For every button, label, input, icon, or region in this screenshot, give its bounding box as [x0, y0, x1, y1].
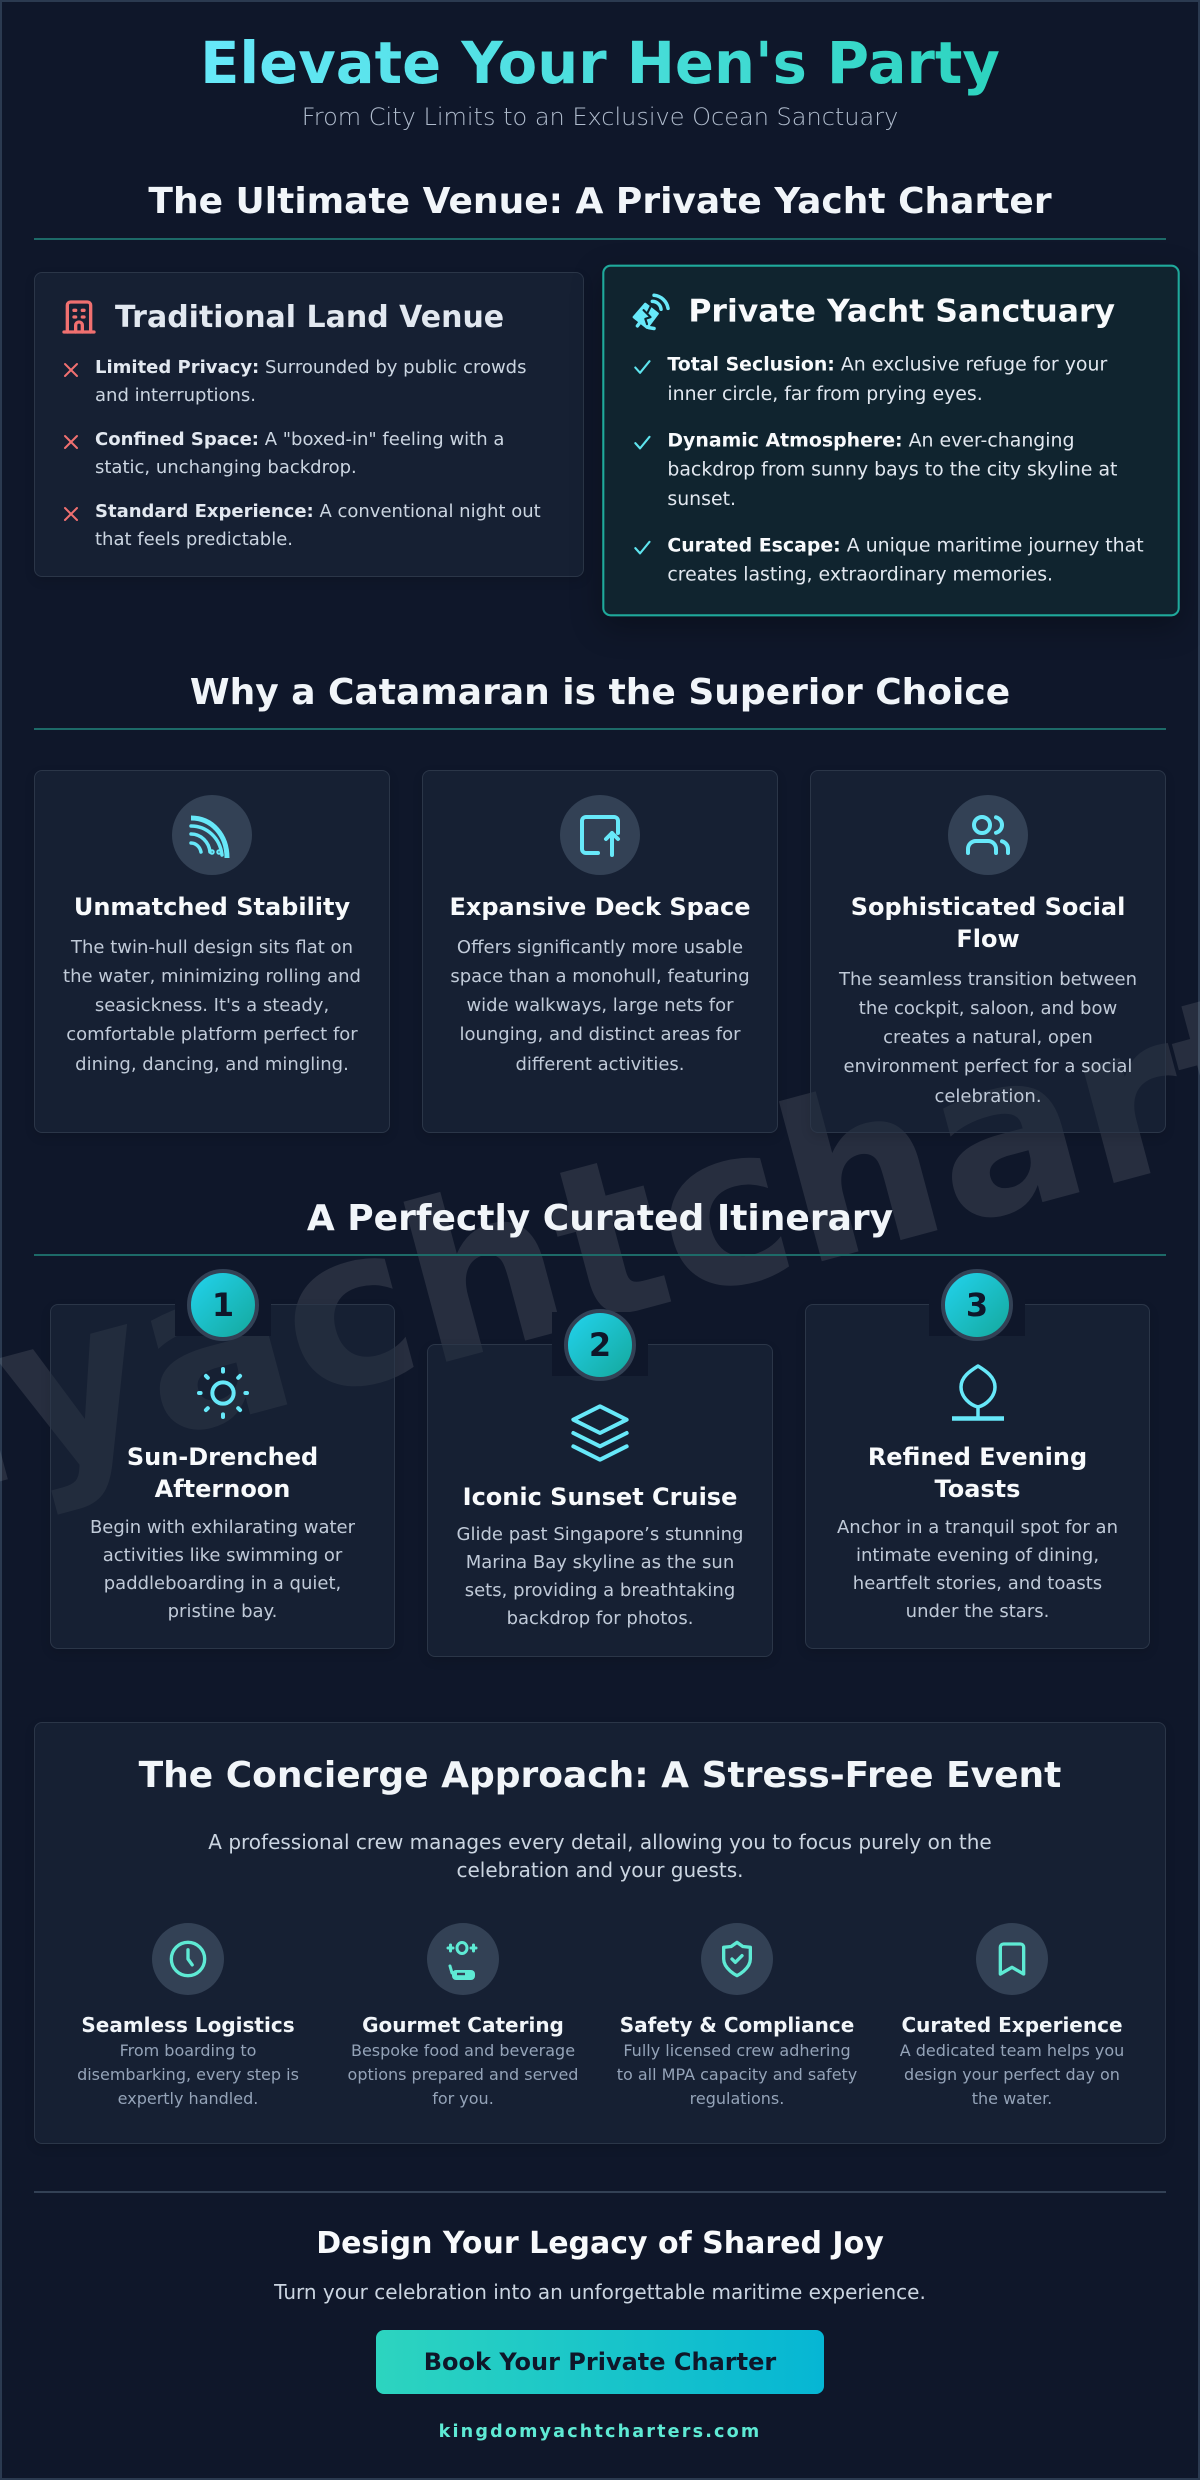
step badge 3 — [941, 1269, 1013, 1341]
heading: ultimate venue: The Ultimate Venue: A Private Yacht Charter — [148, 181, 1052, 222]
card text: under the stars. — [906, 1601, 1049, 1622]
pillar text — [617, 2041, 857, 2108]
pillar text: disembarking, every step is — [77, 2065, 299, 2084]
card text — [838, 968, 1137, 1106]
pillar: safety and compliance — [617, 1923, 857, 2108]
panel heading: The Concierge Approach: A Stress-Free Event — [139, 1755, 1061, 1796]
pillar title: Gourmet Catering — [362, 2013, 564, 2037]
card: sophisticated social flow — [810, 770, 1166, 1133]
pillar title: Safety & Compliance — [620, 2013, 854, 2037]
step badge 3: 3 — [966, 1286, 988, 1324]
card text: sets, providing a breathtaking — [465, 1580, 735, 1601]
item: curated escape: Curated Escape: A unique maritime journey that — [667, 533, 1144, 556]
icon: shield — [701, 1923, 773, 1995]
card text: seasickness. It's a steady, — [95, 995, 329, 1016]
icon: sun — [197, 1367, 249, 1419]
card: unmatched stability — [34, 770, 390, 1133]
card title: Afternoon — [155, 1475, 290, 1503]
pillar: curated experience — [900, 1923, 1124, 2108]
step badge 2 — [564, 1309, 636, 1381]
card text: Begin with exhilarating water — [90, 1516, 355, 1538]
card text — [450, 936, 750, 1074]
number backing 1 — [175, 1272, 271, 1336]
card title — [868, 1443, 1087, 1503]
item: dynamic atmosphere: sunset. — [667, 488, 736, 510]
item: curated escape: creates lasting, extraordinary memories. — [667, 563, 1053, 585]
icon: people — [948, 795, 1028, 875]
card text: backdrop for photos. — [507, 1608, 693, 1629]
pillar text: Bespoke food and beverage — [351, 2041, 575, 2060]
number backing 2 — [552, 1312, 648, 1376]
card text: different activities. — [515, 1054, 685, 1074]
panel: concierge approach — [34, 1722, 1166, 2144]
item: limited privacy: and interruptions. — [95, 385, 256, 406]
pillar text: regulations. — [690, 2089, 784, 2108]
card title — [851, 893, 1125, 953]
card text: creates a natural, open — [883, 1027, 1093, 1048]
heading: catamaran: Why a Catamaran is the Superior Choice — [190, 672, 1010, 713]
icon: catering — [427, 1923, 499, 1995]
icon: glass — [952, 1364, 1004, 1421]
card: sun-drenched afternoon — [50, 1304, 395, 1649]
card text: Offers significantly more usable — [457, 936, 743, 958]
card text: The twin-hull design sits flat on — [71, 936, 353, 958]
card text — [90, 1516, 355, 1622]
panel: traditional land venue — [34, 272, 584, 577]
item: confined space — [64, 428, 504, 478]
number backing 3 — [929, 1272, 1025, 1336]
pillar text: design your perfect day on — [904, 2065, 1120, 2084]
card text: environment perfect for a social — [844, 1056, 1132, 1077]
panel: private yacht sanctuary — [602, 264, 1180, 616]
card text: heartfelt stories, and toasts — [853, 1573, 1102, 1594]
icon: building — [62, 300, 96, 334]
step badge 1 — [187, 1269, 259, 1341]
step badge 2: 2 — [589, 1326, 611, 1364]
card title — [127, 1443, 318, 1503]
panel intro: celebration and your guests. — [456, 1858, 744, 1882]
card text: the water, minimizing rolling and — [63, 966, 361, 987]
card: iconic sunset cruise — [427, 1344, 773, 1657]
pillar title: Curated Experience — [901, 2013, 1123, 2037]
card text — [837, 1516, 1118, 1622]
card text: space than a monohull, featuring — [450, 966, 750, 987]
card title: Sophisticated Social — [851, 893, 1125, 921]
pillar text: to all MPA capacity and safety — [617, 2065, 857, 2084]
title: Elevate Your Hen's Party — [200, 30, 1000, 97]
item: limited privacy: Limited Privacy: Surrounded by public crowds — [95, 356, 526, 378]
icon: layers — [571, 1404, 629, 1462]
pillar text — [900, 2041, 1124, 2108]
card text: Anchor in a tranquil spot for an — [837, 1516, 1118, 1538]
item: total seclusion: Total Seclusion: An exclusive refuge for your — [667, 353, 1107, 375]
card title: Expansive Deck Space — [449, 893, 751, 921]
card text: intimate evening of dining, — [856, 1545, 1099, 1566]
pillar: gourmet catering — [348, 1923, 578, 2108]
card: refined evening toasts — [805, 1304, 1150, 1649]
card title: Unmatched Stability — [74, 893, 350, 921]
pillar text: for you. — [432, 2089, 494, 2108]
card title: Iconic Sunset Cruise — [463, 1483, 737, 1511]
card text: pristine bay. — [168, 1601, 277, 1622]
card text — [63, 936, 361, 1074]
icon: deck — [560, 795, 640, 875]
button — [376, 2330, 824, 2394]
pillar: seamless logistics — [77, 1923, 299, 2108]
icon: bookmark — [976, 1923, 1048, 1995]
item: dynamic atmosphere: Dynamic Atmosphere: An ever-changing — [667, 428, 1075, 450]
pillar text: the water. — [972, 2089, 1052, 2108]
card text: celebration. — [934, 1086, 1042, 1106]
item: standard experience: that feels predictable. — [95, 529, 293, 550]
call to action text: Turn your celebration into an unforgettable maritime experience. — [274, 2280, 926, 2304]
step badge 1: 1 — [212, 1286, 234, 1324]
card text: the cockpit, saloon, and bow — [859, 998, 1117, 1019]
card text: dining, dancing, and mingling. — [75, 1054, 349, 1074]
item: limited privacy — [64, 356, 526, 406]
item: standard experience — [64, 500, 541, 550]
item: total seclusion: inner circle, far from prying eyes. — [667, 382, 983, 404]
panel heading: Private Yacht Sanctuary — [688, 292, 1115, 329]
call to action heading: Design Your Legacy of Shared Joy — [316, 2226, 884, 2261]
panel heading: Traditional Land Venue — [115, 300, 504, 335]
panel intro — [208, 1830, 992, 1882]
pillar text: expertly handled. — [118, 2089, 258, 2108]
item: dynamic atmosphere: backdrop from sunny bays to the city skyline at — [667, 458, 1117, 480]
card text: lounging, and distinct areas for — [459, 1024, 741, 1045]
pillar text — [77, 2041, 299, 2108]
button: Book Your Private Charter — [424, 2348, 776, 2376]
item: standard experience: Standard Experience: A conventional night out — [95, 500, 541, 522]
card: expansive deck space — [422, 770, 778, 1133]
pillar text: A dedicated team helps you — [900, 2041, 1124, 2060]
item: dynamic atmosphere — [634, 428, 1117, 510]
card text: Glide past Singapore’s stunning — [457, 1524, 743, 1545]
card text: comfortable platform perfect for — [66, 1024, 358, 1045]
card text — [457, 1524, 743, 1629]
item: confined space: static, unchanging backdrop. — [95, 457, 357, 478]
heading: itinerary: A Perfectly Curated Itinerary — [307, 1198, 893, 1239]
card text: The seamless transition between — [839, 968, 1137, 990]
website: kingdomyachtcharters.com — [439, 2422, 761, 2442]
item: curated escape — [634, 533, 1144, 585]
card title: Sun-Drenched — [127, 1443, 318, 1471]
pillar title: Seamless Logistics — [81, 2013, 295, 2037]
subtitle: From City Limits to an Exclusive Ocean Sanctuary — [302, 103, 898, 131]
icon: stability — [172, 795, 252, 875]
card text: paddleboarding in a quiet, — [104, 1573, 341, 1594]
panel intro: A professional crew manages every detail, allowing you to focus purely on the — [208, 1830, 992, 1854]
card text: Marina Bay skyline as the sun — [466, 1552, 734, 1573]
card title: Refined Evening — [868, 1443, 1087, 1471]
card text: wide walkways, large nets for — [466, 995, 734, 1016]
icon: yacht — [632, 294, 670, 330]
pillar text: options prepared and served — [348, 2065, 578, 2084]
item: confined space: Confined Space: A "boxed-in" feeling with a — [95, 428, 504, 450]
card title: Flow — [956, 925, 1020, 953]
icon: clock — [152, 1923, 224, 1995]
pillar text: Fully licensed crew adhering — [623, 2041, 851, 2060]
pillar text: From boarding to — [120, 2041, 256, 2060]
card text: activities like swimming or — [103, 1545, 342, 1566]
item: total seclusion — [634, 353, 1108, 404]
card title: Toasts — [935, 1475, 1020, 1503]
pillar text — [348, 2041, 578, 2108]
